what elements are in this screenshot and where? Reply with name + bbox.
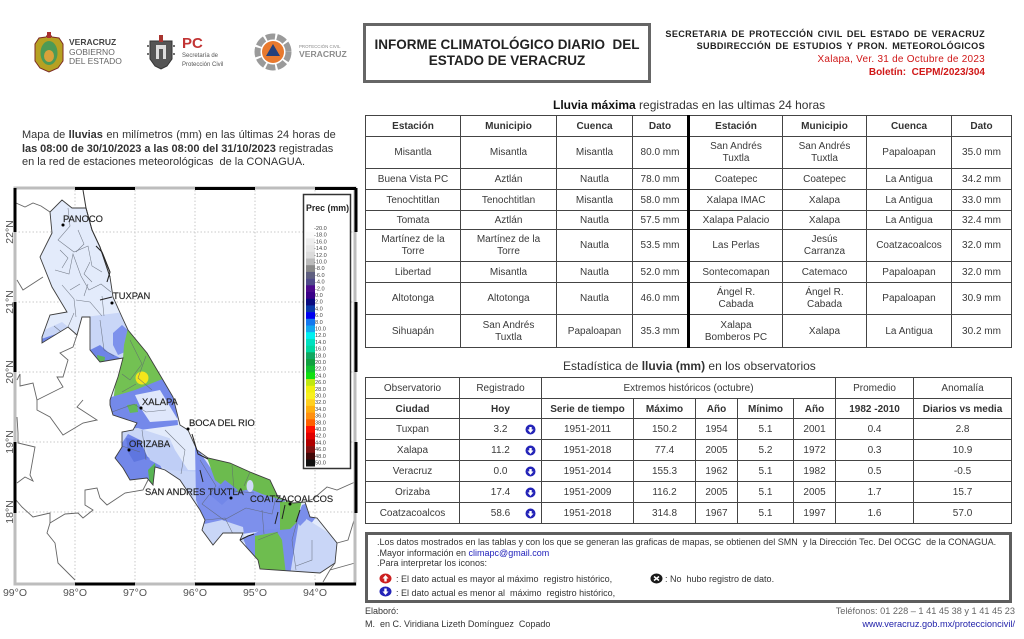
table: maximum rainfall: Cuenca bbox=[891, 121, 927, 132]
table: maximum rainfall: Misantla bbox=[490, 147, 527, 158]
table: maximum rainfall: 58.0 mm bbox=[641, 194, 679, 206]
city labels: PANOCO bbox=[63, 213, 103, 224]
table: maximum rainfall: 52.0 mm bbox=[641, 266, 679, 278]
table: maximum rainfall: Coatepec bbox=[715, 174, 757, 184]
table: observatory statistics: 1951-2018 bbox=[564, 508, 611, 518]
city labels: COATZACOALCOS bbox=[250, 493, 333, 504]
table: observatory statistics: 155.3 bbox=[652, 466, 677, 476]
table: observatory statistics: Observatorio bbox=[384, 382, 441, 394]
table: observatory statistics: Xalapa bbox=[397, 444, 428, 456]
table: observatory statistics: 58.6 bbox=[491, 508, 510, 518]
title box bbox=[363, 23, 651, 83]
table: maximum rainfall: Xalapa bbox=[720, 320, 752, 330]
map description: Mapa de lluvias en milímetros (mm) en las últimas 24 horas de bbox=[22, 129, 336, 141]
table: maximum rainfall: La Antigua bbox=[885, 326, 933, 336]
latitude axis labels: 19°N bbox=[4, 430, 16, 454]
precipitation legend: -12.0 bbox=[314, 253, 327, 259]
table: maximum rainfall: Martínez de la bbox=[477, 234, 540, 245]
table: observatory statistics: 1972 bbox=[803, 444, 826, 456]
precipitation legend: 4.0 bbox=[315, 306, 323, 312]
table: observatory statistics: 5.1 bbox=[759, 508, 772, 518]
table: maximum rainfall bbox=[365, 115, 1012, 348]
table: observatory statistics: Año bbox=[805, 404, 824, 414]
city labels bbox=[62, 213, 333, 506]
table: observatory statistics: 2.8 bbox=[956, 424, 969, 434]
table: maximum rainfall: 30.9 mm bbox=[962, 293, 1001, 304]
table: observatory statistics: 0.5 bbox=[868, 466, 881, 476]
longitude axis labels: 99°O bbox=[3, 587, 27, 599]
city labels: SAN ANDRES TUXTLA bbox=[145, 486, 245, 497]
logo: Protección Civil Veracruz bbox=[254, 34, 347, 70]
table: maximum rainfall: San Andrés bbox=[799, 141, 850, 152]
legend text: no data: : No hubo registro de dato. bbox=[665, 574, 774, 584]
table: maximum rainfall: Xalapa bbox=[809, 214, 840, 226]
table: observatory statistics: 1962 bbox=[705, 466, 728, 476]
table: maximum rainfall: Xalapa bbox=[809, 194, 840, 206]
table: observatory statistics: Tuxpan bbox=[396, 424, 429, 434]
table: maximum rainfall: Carranza bbox=[804, 246, 845, 257]
table: observatory statistics: Registrado bbox=[476, 382, 525, 394]
precipitation legend: 22.0 bbox=[315, 367, 326, 373]
table: observatory statistics: 77.4 bbox=[655, 444, 674, 456]
icon: below historical maximum bbox=[380, 586, 392, 596]
table: maximum rainfall: Xalapa Palacio bbox=[703, 214, 769, 226]
table: observatory statistics: 2005 bbox=[705, 486, 728, 498]
data source note: .Para interpretar los iconos: bbox=[377, 558, 487, 568]
city labels: TUXPAN bbox=[113, 290, 150, 301]
precipitation legend: 6.0 bbox=[315, 313, 323, 319]
precipitation legend: -6.0 bbox=[315, 273, 325, 279]
table: maximum rainfall: 34.2 mm bbox=[962, 174, 1001, 184]
city labels: XALAPA bbox=[142, 396, 179, 407]
precipitation legend: 28.0 bbox=[315, 387, 326, 393]
precipitation legend: 38.0 bbox=[315, 420, 326, 426]
table: maximum rainfall: 35.0 mm bbox=[962, 147, 1001, 158]
table: maximum rainfall: Cabada bbox=[718, 299, 754, 310]
table: observatory statistics: 2005 bbox=[803, 486, 826, 498]
table: maximum rainfall: Municipio bbox=[801, 121, 848, 132]
longitude axis labels: 96°O bbox=[183, 587, 207, 599]
table: maximum rainfall: San Andrés bbox=[483, 320, 534, 330]
table: maximum rainfall: Estación bbox=[715, 121, 757, 132]
table: observatory statistics: Serie de tiempo bbox=[550, 404, 625, 414]
logo: Gobierno del Estado de Veracruz bbox=[34, 32, 122, 72]
table: maximum rainfall: Nautla bbox=[580, 214, 609, 226]
author credit: M. en C. Viridiana Lizeth Domínguez Copado bbox=[365, 618, 550, 628]
heading: maximum rainfall: Lluvia máxima registradas en las ultimas 24 horas bbox=[553, 98, 825, 112]
legend text: above maximum: : El dato actual es mayor al máximo registro histórico, bbox=[396, 574, 612, 584]
precipitation legend: 30.0 bbox=[315, 394, 326, 400]
table: maximum rainfall: Papaloapan bbox=[568, 326, 621, 336]
table: maximum rainfall: Tenochtitlan bbox=[386, 194, 440, 206]
table: maximum rainfall: Papaloapan bbox=[882, 147, 936, 158]
institution header: SECRETARIA DE PROTECCIÓN CIVIL DEL ESTADO DE VERACRUZ bbox=[665, 29, 985, 39]
table: observatory statistics: 5.2 bbox=[759, 444, 772, 456]
institution header bbox=[665, 28, 985, 78]
table: observatory statistics: 1.7 bbox=[868, 486, 881, 498]
table: maximum rainfall: Misantla bbox=[490, 266, 527, 278]
table: maximum rainfall: Coatepec bbox=[803, 174, 846, 184]
author credit: Elaboró: bbox=[365, 606, 399, 616]
table: maximum rainfall: Cabada bbox=[807, 299, 842, 310]
title box: ESTADO DE VERACRUZ bbox=[429, 53, 585, 68]
precipitation legend: 36.0 bbox=[315, 414, 326, 420]
latitude axis labels: 20°N bbox=[4, 360, 16, 384]
table: observatory statistics: -0.5 bbox=[954, 466, 971, 476]
precipitation legend: -14.0 bbox=[314, 246, 327, 252]
table: maximum rainfall: Dato bbox=[649, 121, 671, 132]
state of Veracruz rainfall regions bbox=[40, 201, 336, 572]
precipitation legend: 32.0 bbox=[315, 400, 326, 406]
precipitation legend: 40.0 bbox=[315, 427, 326, 433]
table: observatory statistics: 1997 bbox=[803, 508, 826, 518]
longitude axis labels bbox=[3, 587, 327, 599]
data source note: .Los datos mostrados en las tablas y con los que se generan las graficas de mapas, se obtienen del SMN y la Dirección Tec. Del OCGC de la CONAGUA. bbox=[377, 537, 996, 547]
table: observatory statistics: Año bbox=[707, 404, 726, 414]
table: maximum rainfall: 32.0 mm bbox=[962, 240, 1001, 251]
table: observatory statistics: 1951-2018 bbox=[564, 444, 611, 456]
longitude axis labels: 95°O bbox=[243, 587, 267, 599]
latitude axis labels: 21°N bbox=[4, 290, 16, 314]
precipitation legend: 26.0 bbox=[315, 380, 326, 386]
map frame bbox=[15, 188, 356, 584]
table: maximum rainfall: Nautla bbox=[580, 240, 609, 251]
table: observatory statistics: 0.3 bbox=[868, 444, 881, 456]
latitude axis labels: 18°N bbox=[4, 500, 16, 524]
table: maximum rainfall: Sontecomapan bbox=[702, 266, 770, 278]
table: observatory statistics: Mínimo bbox=[748, 404, 783, 414]
table: observatory statistics: 5.1 bbox=[759, 466, 772, 476]
latitude axis labels bbox=[4, 220, 16, 524]
table: maximum rainfall: Estación bbox=[392, 121, 434, 132]
city labels: BOCA DEL RIO bbox=[189, 417, 255, 428]
heading: observatory statistics: Estadística de lluvia (mm) en los observatorios bbox=[563, 359, 816, 373]
table: observatory statistics: 150.2 bbox=[652, 424, 677, 434]
table: observatory statistics: 314.8 bbox=[652, 508, 677, 518]
longitude axis labels: 98°O bbox=[63, 587, 87, 599]
table: maximum rainfall: Torre bbox=[402, 246, 424, 257]
table: maximum rainfall: San Andrés bbox=[710, 141, 762, 152]
logo: Protección Civil Veracruz: VERACRUZ bbox=[299, 49, 347, 59]
table: observatory statistics: 1967 bbox=[705, 508, 728, 518]
author credit bbox=[365, 606, 550, 629]
logo: Gobierno del Estado de Veracruz: GOBIERNO bbox=[69, 46, 115, 56]
table: maximum rainfall: Tuxtla bbox=[811, 153, 838, 164]
longitude axis labels: 97°O bbox=[123, 587, 147, 599]
precipitation legend: 48.0 bbox=[315, 454, 326, 460]
logo: Gobierno del Estado de Veracruz: DEL ESTADO bbox=[69, 56, 122, 66]
precipitation legend: 42.0 bbox=[315, 434, 326, 440]
table: maximum rainfall: Bomberos PC bbox=[705, 332, 767, 342]
table: observatory statistics: 0.4 bbox=[868, 424, 881, 434]
table: maximum rainfall: Xalapa IMAC bbox=[707, 194, 765, 206]
table: maximum rainfall: 46.0 mm bbox=[641, 293, 679, 304]
logo: Secretaría de Protección Civil: PC bbox=[182, 35, 203, 52]
table: observatory statistics: Extremos históricos (octubre) bbox=[623, 382, 754, 394]
precipitation legend: -18.0 bbox=[314, 233, 327, 239]
table: observatory statistics: 1982 bbox=[803, 466, 826, 476]
table: observatory statistics: 10.9 bbox=[953, 444, 972, 456]
table: maximum rainfall: Aztlán bbox=[495, 214, 522, 226]
precipitation map bbox=[3, 186, 358, 599]
precipitation legend bbox=[304, 194, 350, 468]
city labels: ORIZABA bbox=[129, 438, 171, 449]
table: observatory statistics: 2005 bbox=[705, 444, 728, 456]
logo: Gobierno del Estado de Veracruz: VERACRUZ bbox=[69, 37, 116, 47]
precipitation legend: 18.0 bbox=[315, 353, 326, 359]
precipitation legend: -4.0 bbox=[315, 280, 325, 286]
table: observatory statistics: 0.0 bbox=[494, 466, 507, 476]
table: maximum rainfall: 57.5 mm bbox=[641, 214, 679, 226]
table: maximum rainfall: Martínez de la bbox=[381, 234, 445, 245]
table: observatory statistics: 1951-2014 bbox=[564, 466, 611, 476]
table: maximum rainfall: Altotonga bbox=[487, 293, 530, 304]
table: maximum rainfall: Nautla bbox=[580, 293, 609, 304]
precipitation legend: 14.0 bbox=[315, 340, 326, 346]
table: observatory statistics: 1951-2009 bbox=[564, 486, 611, 498]
title box: INFORME CLIMATOLÓGICO DIARIO DEL bbox=[374, 37, 640, 52]
data source note: .Mayor información en climapc@gmail.com bbox=[377, 548, 549, 558]
table: maximum rainfall: 53.5 mm bbox=[641, 240, 679, 251]
institution header: Xalapa, Ver. 31 de Octubre de 2023 bbox=[817, 54, 985, 65]
table: maximum rainfall: Xalapa bbox=[809, 326, 840, 336]
precipitation legend: 8.0 bbox=[315, 320, 323, 326]
table: observatory statistics: 57.0 bbox=[953, 508, 972, 518]
table: observatory statistics: Anomalía bbox=[941, 382, 984, 394]
notes panel bbox=[365, 532, 1012, 603]
logo: Secretaría de Protección Civil: Secretaría de bbox=[182, 53, 218, 59]
table: observatory statistics: 3.2 bbox=[494, 424, 507, 434]
latitude axis labels: 22°N bbox=[4, 220, 16, 244]
table: maximum rainfall: 35.3 mm bbox=[641, 326, 679, 336]
table: observatory statistics: Promedio bbox=[853, 382, 896, 394]
precipitation legend: 2.0 bbox=[315, 300, 323, 306]
precipitation legend: 24.0 bbox=[315, 373, 326, 379]
table: observatory statistics: 2001 bbox=[803, 424, 826, 434]
longitude axis labels: 94°O bbox=[303, 587, 327, 599]
contact details: www.veracruz.gob.mx/proteccioncivil/ bbox=[862, 618, 1015, 628]
precipitation legend: 50.0 bbox=[315, 460, 326, 466]
table: maximum rainfall: Aztlán bbox=[495, 174, 522, 184]
table: maximum rainfall: 30.2 mm bbox=[962, 326, 1001, 336]
table: observatory statistics: 15.7 bbox=[953, 486, 972, 498]
legend text: below maximum: : El dato actual es menor al máximo registro histórico, bbox=[396, 588, 615, 598]
table: maximum rainfall: Misantla bbox=[394, 147, 432, 158]
table: observatory statistics: 1982 -2010 bbox=[849, 404, 900, 414]
table: observatory statistics: 11.2 bbox=[491, 444, 510, 456]
table: maximum rainfall: Cuenca bbox=[576, 121, 613, 132]
table: observatory statistics: 116.2 bbox=[652, 486, 677, 498]
precipitation legend: -10.0 bbox=[314, 260, 327, 266]
table: maximum rainfall: Tuxtla bbox=[723, 153, 749, 164]
institution header: SUBDIRECCIÓN DE ESTUDIOS Y PRON. METEOROLÓGICOS bbox=[697, 41, 985, 51]
table: observatory statistics: Orizaba bbox=[395, 486, 430, 498]
municipal boundaries bbox=[54, 208, 312, 570]
map description: las 08:00 de 30/10/2023 a las 08:00 del 31/10/2023 registradas bbox=[22, 142, 333, 154]
table: observatory statistics: Ciudad bbox=[396, 404, 429, 414]
table: observatory statistics: 5.1 bbox=[759, 486, 772, 498]
table: maximum rainfall: Misantla bbox=[576, 147, 613, 158]
table: observatory statistics bbox=[365, 377, 1012, 524]
table: maximum rainfall: Dato bbox=[970, 121, 993, 132]
table: maximum rainfall: Papaloapan bbox=[882, 266, 936, 278]
table: maximum rainfall: Tenochtitlan bbox=[482, 194, 535, 206]
logo: Secretaría de Protección Civil: Protección Civil bbox=[182, 62, 223, 68]
table: observatory statistics: 17.4 bbox=[491, 486, 510, 498]
precipitation legend: -8.0 bbox=[315, 266, 325, 272]
table: observatory statistics: Hoy bbox=[491, 404, 510, 414]
table: maximum rainfall: La Antigua bbox=[885, 194, 933, 206]
logo: Secretaría de Protección Civil bbox=[147, 35, 223, 70]
precipitation legend: -16.0 bbox=[314, 239, 327, 245]
table: observatory statistics: 5.1 bbox=[759, 424, 772, 434]
table: maximum rainfall: Coatzacoalcos bbox=[876, 240, 942, 251]
table: maximum rainfall: Torre bbox=[497, 246, 520, 257]
table: maximum rainfall: 80.0 mm bbox=[641, 147, 679, 158]
table: maximum rainfall: 32.0 mm bbox=[962, 266, 1001, 278]
table: maximum rainfall: Papaloapan bbox=[882, 293, 936, 304]
table: maximum rainfall: Municipio bbox=[485, 121, 532, 132]
logo: Protección Civil Veracruz: PROTECCIÓN CIVIL bbox=[299, 44, 340, 49]
table: observatory statistics: 1.6 bbox=[868, 508, 881, 518]
contact details bbox=[836, 606, 1015, 629]
table: observatory statistics: 1954 bbox=[705, 424, 728, 434]
map description bbox=[22, 129, 336, 168]
table: maximum rainfall: 32.4 mm bbox=[962, 214, 1001, 226]
precipitation legend: 12.0 bbox=[315, 333, 326, 339]
precipitation legend: 16.0 bbox=[315, 347, 326, 353]
table: maximum rainfall: Jesús bbox=[811, 234, 838, 245]
table: observatory statistics: 1951-2011 bbox=[564, 424, 611, 434]
table: maximum rainfall: Tomata bbox=[397, 214, 429, 226]
table: maximum rainfall: 33.0 mm bbox=[962, 194, 1001, 206]
icon: no data bbox=[650, 574, 662, 584]
table: maximum rainfall: Misantla bbox=[576, 194, 613, 206]
grid bbox=[15, 190, 355, 583]
neighbouring state borders bbox=[16, 203, 355, 582]
precipitation legend: -20.0 bbox=[314, 226, 327, 232]
precipitation legend: 10.0 bbox=[315, 326, 326, 332]
table: maximum rainfall: Las Perlas bbox=[712, 240, 760, 251]
table: maximum rainfall: Ángel R. bbox=[805, 287, 844, 298]
table: observatory statistics: Veracruz bbox=[393, 466, 432, 476]
table: maximum rainfall: Nautla bbox=[580, 266, 609, 278]
data source note bbox=[377, 537, 996, 568]
table: maximum rainfall: 78.0 mm bbox=[641, 174, 679, 184]
contact details: Teléfonos: 01 228 – 1 41 45 38 y 1 41 45 23 bbox=[836, 606, 1015, 616]
table: maximum rainfall: Nautla bbox=[580, 174, 609, 184]
map description: en la red de estaciones meteorológicas de la CONAGUA. bbox=[22, 156, 305, 168]
precipitation legend: -2.0 bbox=[315, 286, 325, 292]
table: maximum rainfall: Catemaco bbox=[802, 266, 847, 278]
table: observatory statistics: Máximo bbox=[646, 404, 683, 414]
table: maximum rainfall: Ángel R. bbox=[717, 287, 755, 298]
precipitation legend: 44.0 bbox=[315, 440, 326, 446]
precipitation legend: 34.0 bbox=[315, 407, 326, 413]
icon: above historical maximum bbox=[380, 574, 392, 584]
table: maximum rainfall: Altotonga bbox=[392, 293, 434, 304]
table: maximum rainfall: Buena Vista PC bbox=[378, 174, 448, 184]
table: observatory statistics: Diarios vs media bbox=[923, 404, 1002, 414]
precipitation legend: 0.0 bbox=[315, 293, 323, 299]
institution header: Boletín: CEPM/2023/304 bbox=[869, 67, 985, 78]
precipitation legend: 46.0 bbox=[315, 447, 326, 453]
precipitation legend: Prec (mm) bbox=[306, 203, 349, 213]
table: maximum rainfall: La Antigua bbox=[885, 214, 933, 226]
table: maximum rainfall: Tuxtla bbox=[495, 332, 522, 342]
state outline and coast bbox=[40, 190, 337, 573]
table: observatory statistics: Coatzacoalcos bbox=[380, 508, 445, 518]
table: maximum rainfall: Sihuapán bbox=[392, 326, 434, 336]
table: maximum rainfall: La Antigua bbox=[885, 174, 933, 184]
table: maximum rainfall: Libertad bbox=[395, 266, 431, 278]
precipitation legend: 20.0 bbox=[315, 360, 326, 366]
